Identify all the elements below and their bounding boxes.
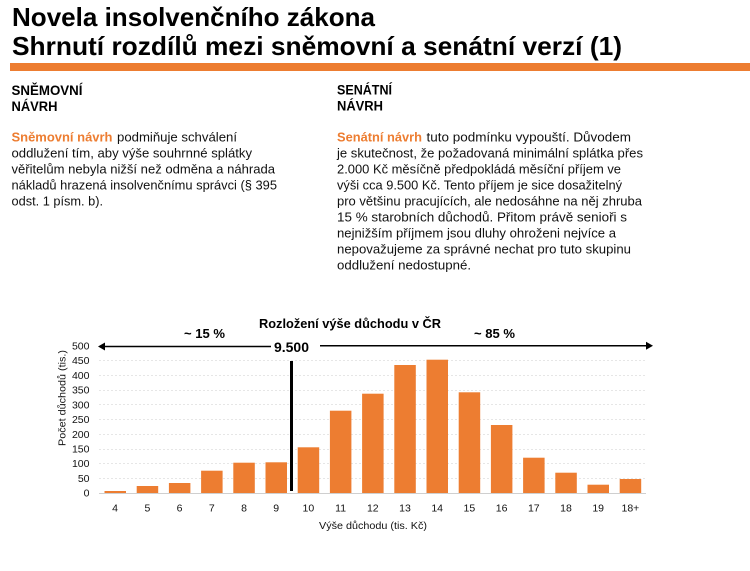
label: 15 %: ~ 15 % — [184, 326, 225, 341]
y axis labels — [72, 340, 90, 500]
text block: senátní návrh: pro většinu pracujících, ale nedosáhne na něj zhruba — [337, 194, 643, 209]
arrow: right 85 % — [320, 342, 653, 350]
text block: senátní návrh: oddlužení nedostupné. — [337, 258, 471, 273]
text block: sněmovní návrh: věřitelům nebyla nižší než odměna a náhrada — [12, 162, 276, 177]
heading: senátní návrh: SENÁTNÍ — [337, 82, 393, 98]
x axis labels — [112, 502, 639, 514]
orange header bar — [10, 63, 750, 71]
text block: senátní návrh: 15 % starobních důchodů. Přitom právě senioři s — [337, 210, 627, 225]
x axis title: Výše důchodu (tis. Kč) — [319, 520, 427, 532]
text block: sněmovní návrh: Sněmovní návrh — [12, 130, 112, 145]
x axis labels: 16 — [496, 502, 508, 514]
text block: senátní návrh: Senátní návrh — [337, 130, 422, 145]
text block: senátní návrh: 2.000 Kč měsíčně předpokládá měsíční příjem ve — [337, 162, 621, 177]
text block: sněmovní návrh — [12, 130, 277, 209]
text block: senátní návrh: tuto podmínku vypouští. Důvodem — [426, 130, 631, 145]
text block: senátní návrh — [336, 130, 643, 273]
x axis labels: 12 — [367, 502, 379, 514]
threshold label: 9.500 — [274, 339, 309, 355]
x axis labels: 15 — [464, 502, 475, 514]
x axis labels: 11 — [335, 502, 346, 514]
text block: sněmovní návrh: oddlužení tím, aby výše souhrnné splátky — [12, 146, 252, 161]
y axis labels: 0 — [84, 488, 90, 500]
text block: senátní návrh: nepovažujeme za správné nechat pro tuto skupinu — [337, 242, 631, 257]
bars — [104, 360, 641, 493]
x axis labels: 8 — [241, 502, 247, 514]
label: 85 %: ~ 85 % — [474, 326, 515, 341]
text block: sněmovní návrh: odst. 1 písm. b). — [12, 194, 103, 209]
text block: senátní návrh: výši cca 9.500 Kč. Tento příjem je sice dosažitelný — [337, 178, 622, 193]
x axis labels: 18+ — [621, 502, 639, 514]
title: Novela insolvenčního zákona — [12, 2, 376, 32]
bar chart: rozložení výše důchodu — [56, 316, 653, 532]
heading: sněmovní návrh: SNĚMOVNÍ — [12, 83, 84, 98]
x axis labels: 7 — [209, 502, 215, 514]
y axis labels: 100 — [72, 458, 90, 470]
x axis labels: 13 — [399, 502, 411, 514]
panel: sněmovní návrh — [12, 83, 277, 209]
y axis labels: 150 — [72, 444, 90, 456]
x axis labels: 4 — [112, 502, 118, 514]
text block: senátní návrh: je skutečnost, že požadovaná minimální splátka přes — [336, 146, 643, 161]
y axis title: Počet důchodů (tis.) — [56, 350, 68, 446]
y axis labels: 500 — [72, 340, 90, 352]
text block: sněmovní návrh: podmiňuje schválení — [117, 130, 237, 145]
x axis labels: 5 — [144, 502, 150, 514]
title: Shrnutí rozdílů mezi sněmovní a senátní verzí (1) — [12, 31, 622, 61]
y axis labels: 50 — [78, 473, 90, 485]
text block: senátní návrh: nejnižším příjmem jsou dluhy ohroženi nejvíce a — [337, 226, 617, 241]
title — [12, 2, 622, 61]
panel: senátní návrh — [336, 82, 643, 273]
y axis labels: 400 — [72, 370, 90, 382]
chart title: Rozložení výše důchodu v ČR — [259, 316, 442, 331]
threshold line at 9.500 — [290, 361, 293, 491]
text block: sněmovní návrh: nákladů hrazená insolvenčnímu správci (§ 395 — [12, 178, 277, 193]
x axis labels: 14 — [431, 502, 443, 514]
heading: senátní návrh: NÁVRH — [337, 98, 383, 114]
x axis labels: 10 — [303, 502, 314, 514]
y axis labels: 450 — [72, 355, 90, 367]
heading: senátní návrh — [337, 82, 393, 114]
x axis labels: 6 — [177, 502, 183, 514]
arrow: left 15 % — [98, 342, 271, 350]
heading: sněmovní návrh — [12, 83, 84, 114]
y axis labels: 300 — [72, 399, 90, 411]
x axis labels: 18 — [560, 502, 572, 514]
y axis labels: 200 — [72, 429, 90, 441]
x axis labels: 17 — [528, 502, 540, 514]
x axis labels: 9 — [273, 502, 279, 514]
y axis labels: 250 — [72, 414, 90, 426]
heading: sněmovní návrh: NÁVRH — [12, 99, 58, 114]
y axis labels: 350 — [72, 385, 90, 397]
x axis labels: 19 — [592, 502, 604, 514]
